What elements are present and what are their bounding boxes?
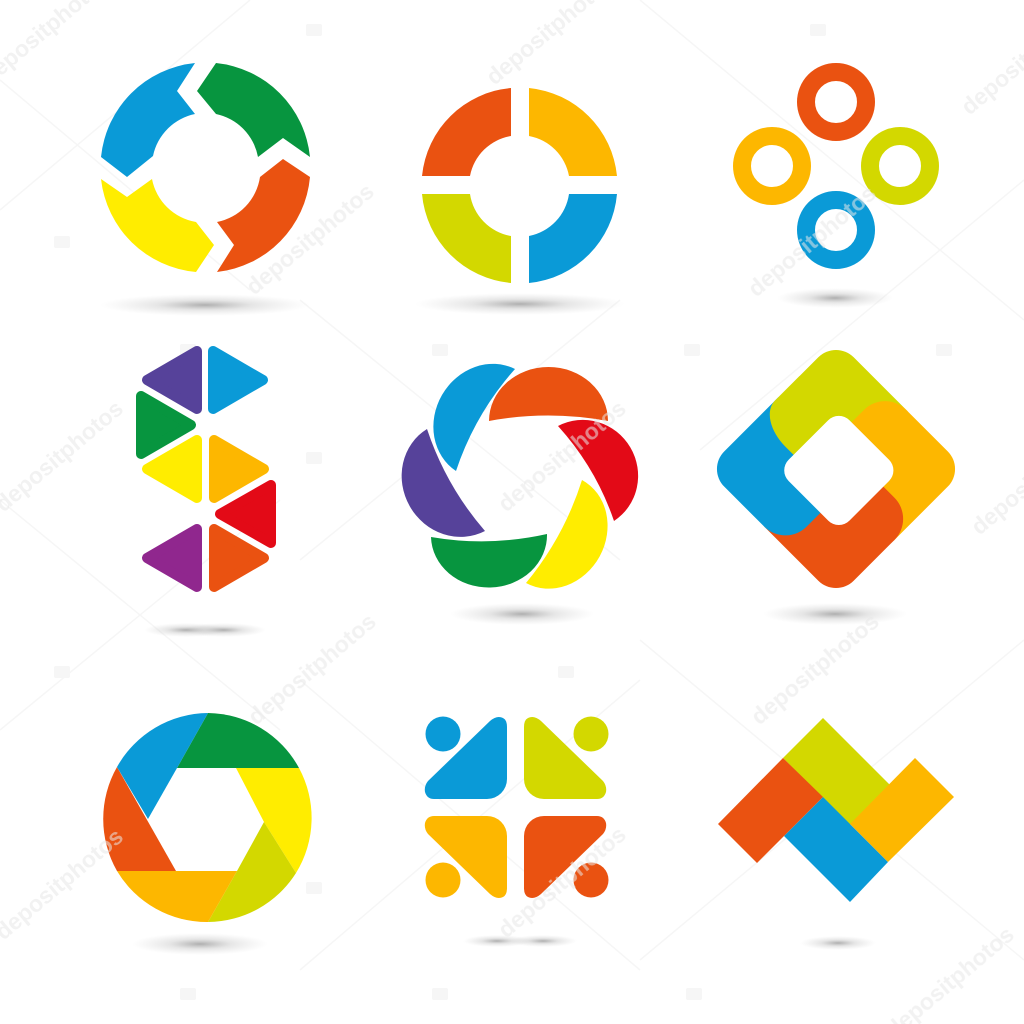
blade: orange bbox=[489, 367, 608, 421]
icon: six-blade swirl bbox=[402, 364, 638, 589]
blade: amber bbox=[117, 871, 237, 922]
watermarks: depositphotos bbox=[243, 608, 381, 730]
band: orange bbox=[764, 447, 916, 598]
dot and triangle: amber bbox=[425, 816, 507, 898]
triangle: indigo bbox=[147, 351, 197, 409]
dot and triangle: lime bbox=[524, 716, 608, 799]
watermarks: depositphotos bbox=[746, 608, 884, 730]
watermarks: depositphotos bbox=[743, 180, 881, 302]
dot and triangle: blue bbox=[425, 716, 507, 799]
arrow: green bbox=[197, 63, 310, 157]
watermarks: depositphotos bbox=[493, 395, 631, 517]
ring: lime bbox=[870, 136, 930, 196]
triangle: red bbox=[220, 485, 271, 543]
segment: lime bbox=[422, 194, 511, 283]
icon: four triangles with dots bbox=[425, 716, 608, 898]
band: lime overlap bbox=[757, 376, 843, 462]
ring: blue bbox=[806, 200, 866, 260]
bar: lime bbox=[783, 718, 890, 825]
triangle: orange bbox=[214, 529, 264, 587]
segment: amber bbox=[529, 88, 617, 176]
watermarks: depositphotos bbox=[493, 821, 631, 943]
shadows under the icons bbox=[100, 288, 907, 955]
band: amber bbox=[813, 389, 965, 541]
blade: red bbox=[558, 420, 638, 521]
band: blue bbox=[707, 397, 857, 548]
blade: orange bbox=[103, 767, 176, 871]
icon: S made of triangles bbox=[141, 351, 271, 587]
triangle: green bbox=[141, 396, 191, 454]
bar: amber bbox=[850, 758, 954, 862]
centre hole bbox=[778, 410, 900, 531]
blade: green bbox=[431, 534, 547, 588]
triangle: yellow bbox=[147, 440, 197, 498]
dot and triangle: orange bbox=[524, 816, 608, 898]
ring: orange bbox=[806, 72, 866, 132]
icon: rounded diamond bbox=[707, 340, 965, 598]
blade: blue bbox=[117, 713, 208, 819]
blade: lime bbox=[208, 822, 296, 922]
icon: circular arrows bbox=[101, 63, 310, 272]
band: lime bbox=[757, 340, 908, 490]
arrow: yellow bbox=[101, 179, 214, 272]
blade: yellow bbox=[526, 480, 608, 589]
ring: amber bbox=[742, 136, 802, 196]
bar: blue bbox=[784, 797, 888, 902]
triangle: amber bbox=[214, 440, 264, 498]
blade: blue bbox=[433, 364, 515, 471]
triangle: blue bbox=[213, 351, 263, 409]
blade: yellow bbox=[236, 768, 312, 873]
icon: four rings bbox=[742, 72, 930, 260]
arrow: blue bbox=[101, 63, 195, 177]
blade: indigo bbox=[402, 429, 485, 537]
watermarks: depositphotos bbox=[241, 178, 379, 300]
blade: green bbox=[177, 713, 299, 768]
bar: orange bbox=[718, 758, 823, 863]
icon: four-segment ring bbox=[422, 88, 617, 283]
segment: blue bbox=[529, 194, 617, 283]
segment: orange bbox=[422, 88, 511, 176]
triangle: purple bbox=[147, 529, 197, 587]
arrow: orange bbox=[217, 159, 310, 272]
icon: interlocking bars bbox=[718, 718, 954, 902]
icon: camera aperture bbox=[103, 713, 312, 922]
